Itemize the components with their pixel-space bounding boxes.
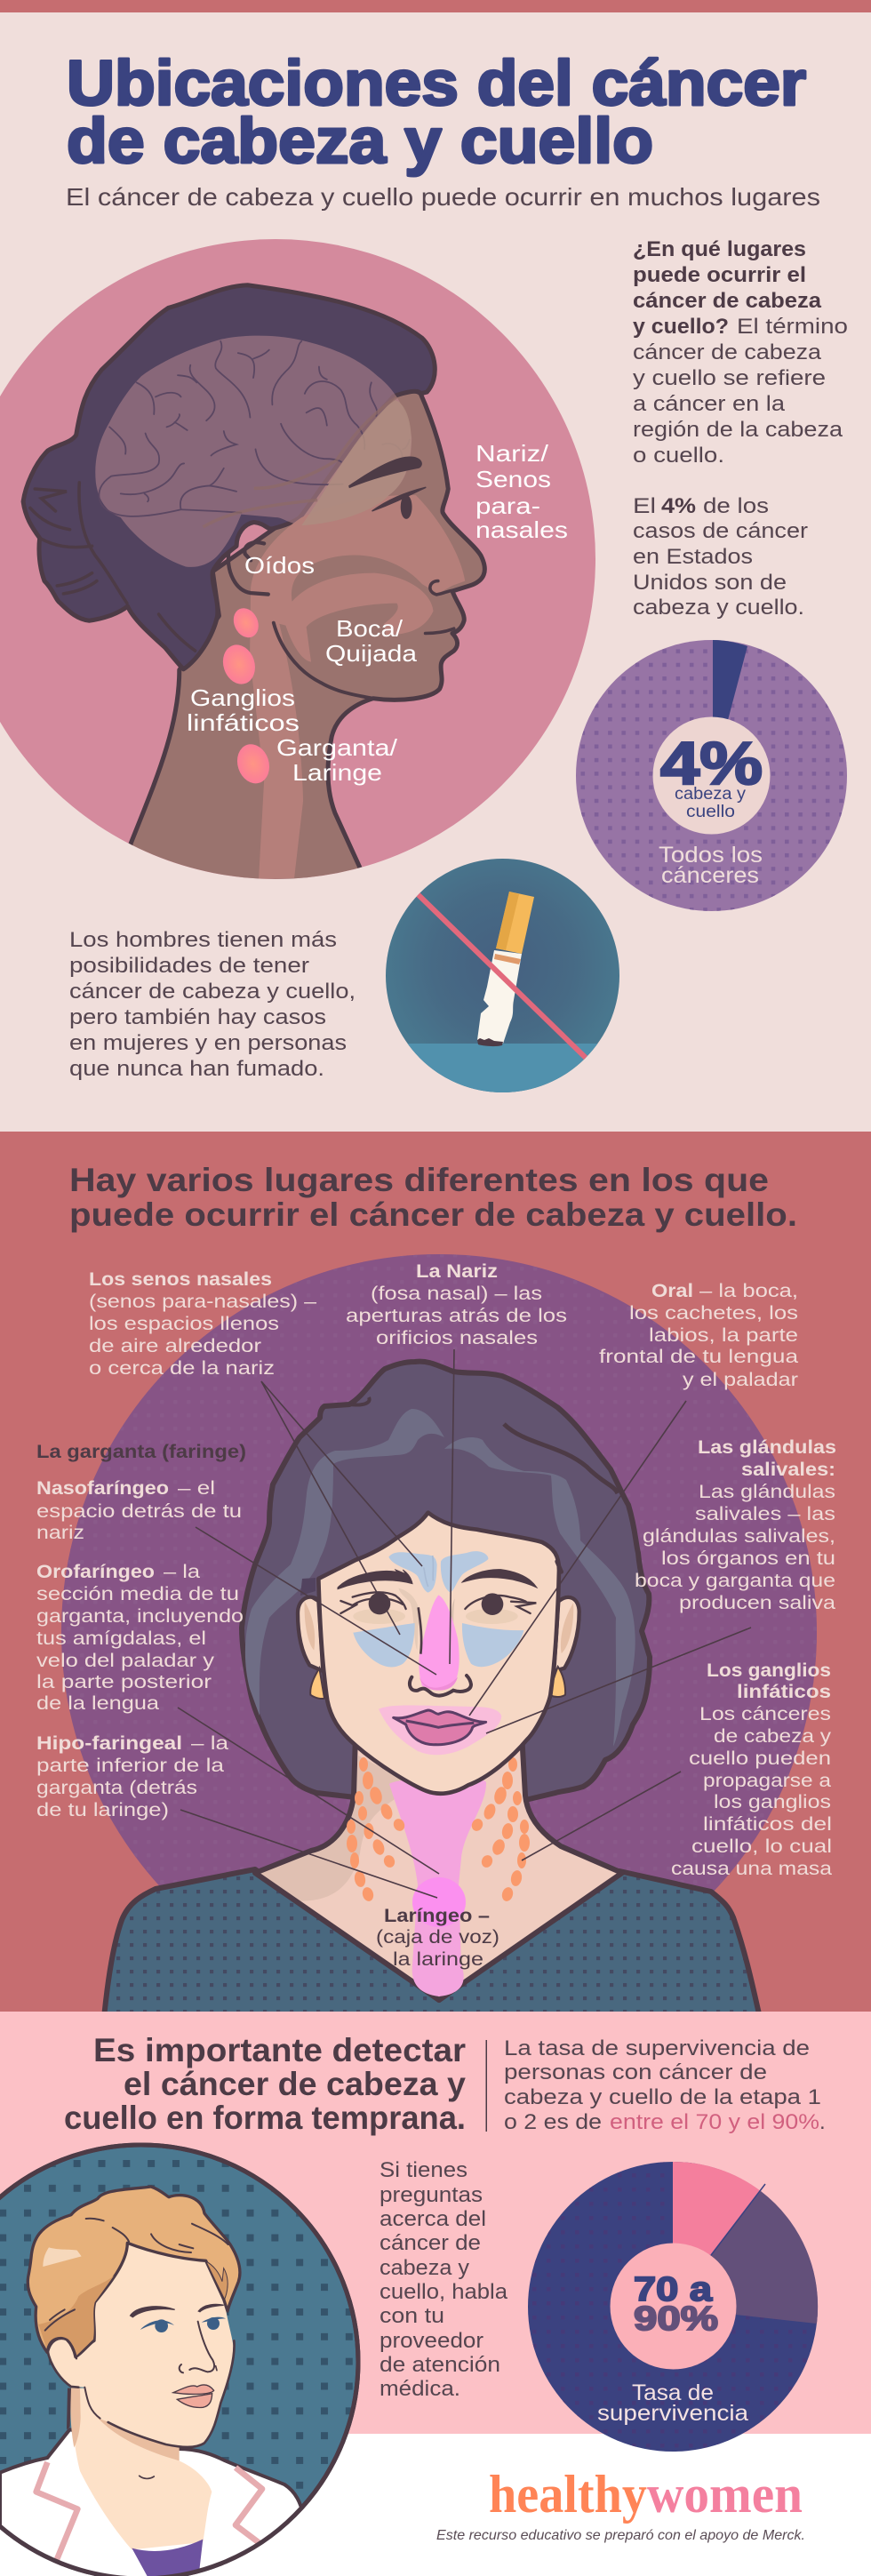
text block: survival rate: cabeza y cuello de la etapa 1 [504, 2085, 821, 2109]
label: nasofaringeo: – el [178, 1478, 215, 1499]
chart: survival rate donut: 70 a [634, 2271, 713, 2308]
text block: 4 percent statistic: en Estados [633, 545, 753, 569]
chart: 4 percent pie: cánceres [661, 863, 759, 888]
text block: 4 percent statistic [633, 494, 808, 620]
text block: 4 percent statistic: cabeza y cuello. [633, 596, 804, 620]
chart: survival rate donut: Tasa de [632, 2380, 714, 2405]
label: oral: los cachetes, los [629, 1303, 798, 1324]
text block: survival rate: o 2 es de [504, 2110, 602, 2134]
heading: many locations: puede ocurrir el cáncer de cabeza y cuello. [69, 1196, 797, 1233]
label: ganglios linfaticos: Los ganglios [707, 1660, 831, 1681]
eye and nose shading [353, 1609, 405, 1624]
label: ganglios linfaticos: linfáticos del [703, 1814, 832, 1835]
label: hipo-faringeal: garganta (detrás [36, 1778, 197, 1798]
label: glandulas salivales: salivales: [741, 1460, 835, 1480]
label: ganglios linfaticos: de cabeza y [714, 1726, 832, 1747]
coat [0, 2429, 304, 2576]
sinus light overlay [301, 400, 412, 525]
text block: survival rate: entre el 70 y el 90% [610, 2110, 819, 2134]
label: nasofaringeo: espacio detrás de tu [36, 1501, 242, 1522]
text block: definition: puede ocurrir el [633, 263, 806, 287]
label: oral: – la boca, [699, 1281, 798, 1301]
head labels: Quijada [325, 640, 418, 667]
text block: ask provider: con tu [380, 2304, 444, 2328]
heading: early detection: cuello en forma temprana. [64, 2100, 466, 2136]
nostrils [410, 1676, 471, 1696]
text block: definition: cáncer de cabeza [633, 289, 822, 313]
neck [69, 2388, 212, 2549]
heading: early detection: el cáncer de cabeza y [124, 2066, 466, 2102]
face group [298, 1513, 579, 1794]
label: laringeo [376, 1906, 499, 1970]
head labels: linfáticos [187, 709, 300, 736]
title: Ubicaciones del cáncer [67, 49, 806, 119]
hair strokes [30, 483, 196, 651]
label: orofaringeo: la parte posterior [36, 1672, 212, 1692]
label: nasofaringeo [36, 1478, 242, 1543]
text block: survival rate: personas con cáncer de [504, 2060, 767, 2084]
chart: 4 percent pie: cuello [686, 803, 735, 821]
text block: ask provider: médica. [380, 2377, 460, 2401]
hair lines [45, 2219, 228, 2331]
label: nasofaringeo: Nasofaríngeo [36, 1478, 169, 1499]
label: senos nasales: (senos para-nasales) – [89, 1292, 316, 1312]
label: ganglios linfaticos: los ganglios [714, 1792, 831, 1812]
eyes [340, 1592, 536, 1613]
hair [28, 2187, 240, 2357]
label: oral [599, 1281, 798, 1390]
label: hipo-faringeal: de tu laringe) [36, 1800, 169, 1820]
label: la nariz: aperturas atrás de los [346, 1306, 567, 1326]
label: orofaringeo: tus amígdalas, el [36, 1628, 206, 1649]
icon: no smoking cigarette [382, 859, 622, 1097]
face [47, 2243, 234, 2447]
eyes [140, 2317, 226, 2332]
label: hipo-faringeal: parte inferior de la [36, 1756, 224, 1776]
head labels: Garganta/ [276, 734, 398, 761]
neck [300, 1749, 617, 1996]
sinuses [353, 1551, 523, 1667]
label: ganglios linfaticos: Los cánceres [699, 1704, 831, 1724]
text block: men more likely: cáncer de cabeza y cuello, [69, 980, 356, 1004]
mouth [173, 2385, 214, 2394]
label: hipo-faringeal: Hipo-faringeal [36, 1733, 182, 1754]
label: ganglios linfaticos: cuello pueden [689, 1748, 831, 1769]
title: de cabeza y cuello [67, 107, 653, 177]
label: oral: labios, la parte [649, 1325, 798, 1346]
label: laringeo: Laríngeo – [384, 1906, 490, 1926]
text block: ask provider: de atención [380, 2353, 500, 2377]
label: la nariz: (fosa nasal) – las [371, 1284, 542, 1304]
label: oral: Oral [651, 1281, 693, 1301]
head labels: Senos [475, 466, 551, 492]
lymph nodes [218, 604, 275, 788]
face details [348, 456, 422, 488]
label: orofaringeo: garganta, incluyendo [36, 1606, 244, 1627]
text block: ask provider: cuello, habla [380, 2280, 508, 2304]
label: glandulas salivales: salivales – las [695, 1504, 835, 1524]
footer credit: Este recurso educativo se preparó con el apoyo de Merck. [436, 2528, 805, 2543]
chart: survival rate donut: 90% [634, 2300, 718, 2338]
head labels [187, 440, 568, 786]
text block: survival rate: La tasa de supervivencia de [504, 2036, 810, 2060]
label: ganglios linfaticos: linfáticos [737, 1682, 831, 1702]
nose airway [419, 1595, 459, 1690]
label: la nariz: orificios nasales [376, 1328, 538, 1348]
hair highlights [245, 1409, 444, 1716]
face [318, 1513, 559, 1794]
head labels: Nariz/ [475, 440, 549, 467]
label: la nariz: La Nariz [416, 1261, 498, 1282]
hair shadow [38, 2276, 114, 2356]
logo: healthywomen: women [647, 2465, 803, 2524]
label: orofaringeo: – la [164, 1562, 200, 1582]
text block: 4 percent statistic: de los [703, 494, 769, 518]
text block: definition: cáncer de cabeza [633, 340, 822, 364]
label: oral: y el paladar [683, 1370, 798, 1390]
lapels [36, 2462, 268, 2576]
label: glandulas salivales: Las glándulas [698, 1437, 836, 1458]
text block: definition: a cáncer en la [633, 392, 786, 416]
hair [242, 1362, 650, 1800]
brain [95, 336, 412, 567]
text block: 4 percent statistic: El [633, 494, 656, 518]
text block: definition: o cuello. [633, 444, 724, 468]
airway overlay [250, 495, 465, 879]
shirt [104, 1869, 760, 2018]
brain folds [99, 341, 410, 516]
label: senos nasales: los espacios llenos [89, 1314, 279, 1334]
logo: healthywomen: healthy [489, 2465, 647, 2524]
label: orofaringeo: sección media de tu [36, 1584, 239, 1604]
heading: many locations [69, 1162, 797, 1233]
ears [298, 1597, 323, 1671]
text block: definition [633, 237, 848, 468]
earrings [310, 1668, 324, 1699]
neck shadow [255, 1756, 427, 1901]
brows [131, 2307, 175, 2317]
label: ganglios linfaticos: cuello, lo cual [691, 1836, 832, 1857]
label: glandulas salivales: boca y garganta que [635, 1571, 835, 1591]
label: glandulas salivales [635, 1437, 836, 1613]
head labels: Laringe [292, 759, 382, 786]
label: orofaringeo [36, 1562, 244, 1714]
label: glandulas salivales: glándulas salivales, [643, 1526, 835, 1547]
label: orofaringeo: velo del paladar y [36, 1651, 215, 1671]
label: laringeo: (caja de voz) [376, 1927, 499, 1948]
hair [23, 285, 435, 669]
label: hipo-faringeal: – la [191, 1733, 228, 1754]
text block: ask provider: Si tienes [380, 2158, 467, 2182]
label: hipo-faringeal [36, 1733, 228, 1820]
larynx [412, 1877, 466, 1927]
text block: survival rate: . [819, 2110, 826, 2134]
lymph nodes [347, 1757, 530, 1902]
text block: survival rate [504, 2036, 826, 2134]
label: la nariz [346, 1261, 567, 1348]
heading: many locations: Hay varios lugares diferentes en los que [69, 1162, 769, 1198]
label: glandulas salivales: producen saliva [679, 1593, 835, 1613]
text block: ask provider [380, 2158, 508, 2401]
text block: ask provider: acerca del [380, 2207, 486, 2231]
label: la garganta: La garganta (faringe) [36, 1442, 246, 1462]
panel: head profile illustration [0, 239, 595, 889]
chart: 4 percent pie: Todos los [659, 843, 763, 868]
label: ganglios linfaticos: propagarse a [703, 1771, 831, 1791]
shirt [132, 2540, 203, 2576]
sinus shadow strokes [204, 396, 396, 527]
label: senos nasales: de aire alrededor [89, 1336, 261, 1356]
face outline [47, 2322, 235, 2478]
lips [394, 1710, 486, 1745]
text block: men more likely: Los hombres tienen más [69, 928, 337, 952]
text block: men more likely: en mujeres y en personas [69, 1031, 347, 1055]
text block: definition: ¿En qué lugares [633, 237, 806, 261]
label: senos nasales: Los senos nasales [89, 1269, 272, 1290]
label: orofaringeo: de la lengua [36, 1693, 159, 1714]
label: glandulas salivales: Las glándulas [699, 1482, 835, 1502]
text block: 4 percent statistic: Unidos son de [633, 571, 787, 595]
brows [338, 1570, 412, 1589]
neck outline [255, 1733, 622, 2000]
chart: survival rate donut: supervivencia [597, 2401, 748, 2426]
chart: survival rate donut [528, 2162, 818, 2452]
label: glandulas salivales: los órganos en tu [661, 1548, 835, 1569]
head labels: nasales [475, 516, 568, 543]
text block: ask provider: cáncer de [380, 2231, 481, 2255]
chart: 4 percent pie: 4% [660, 730, 763, 797]
text block: definition: y cuello se refiere [633, 366, 826, 390]
text block: definition: y cuello? [633, 315, 729, 339]
mouth area [379, 1705, 501, 1755]
text block: ask provider: preguntas [380, 2183, 483, 2207]
text block: 4 percent statistic: 4% [661, 494, 696, 518]
head labels: Oídos [244, 552, 315, 579]
label: senos nasales [89, 1269, 316, 1379]
heading: early detection: Es importante detectar [93, 2032, 466, 2068]
title [67, 49, 806, 177]
label: oral: frontal de tu lengua [599, 1347, 798, 1367]
label lines [178, 1349, 751, 1898]
throat airway [389, 1777, 486, 1996]
hair strands [504, 1424, 618, 1493]
text block: ask provider: cabeza y [380, 2256, 469, 2280]
label: nasofaringeo: nariz [36, 1523, 84, 1543]
text block: men more likely: que nunca han fumado. [69, 1057, 324, 1081]
text block: men more likely: pero también hay casos [69, 1005, 326, 1029]
head labels: Ganglios [190, 684, 295, 711]
head labels: para- [475, 492, 540, 519]
chart: 4 percent pie: cabeza y [675, 785, 747, 804]
skin [127, 391, 484, 889]
label: senos nasales: o cerca de la nariz [89, 1358, 275, 1379]
text block: men more likely [69, 928, 356, 1081]
label: orofaringeo: Orofaríngeo [36, 1562, 155, 1582]
label: laringeo: la laringe [393, 1949, 483, 1970]
panel: doctor illustration [0, 2145, 358, 2576]
text block: 4 percent statistic: casos de cáncer [633, 519, 808, 543]
logo: healthywomen [489, 2465, 803, 2524]
text block: ask provider: proveedor [380, 2329, 483, 2353]
text block: men more likely: posibilidades de tener [69, 954, 309, 978]
chart: 4 percent pie [576, 640, 847, 911]
head labels: Boca/ [336, 615, 404, 642]
label: ganglios linfaticos: causa una masa [671, 1859, 832, 1879]
text block: definition: región de la cabeza [633, 418, 843, 442]
heading: early detection [64, 2032, 487, 2136]
text block: definition: El término [737, 315, 848, 339]
panel: woman front anatomy illustration [61, 1254, 817, 2018]
label: ganglios linfaticos [671, 1660, 832, 1879]
subtitle: El cáncer de cabeza y cuello puede ocurrir en muchos lugares [66, 183, 820, 211]
